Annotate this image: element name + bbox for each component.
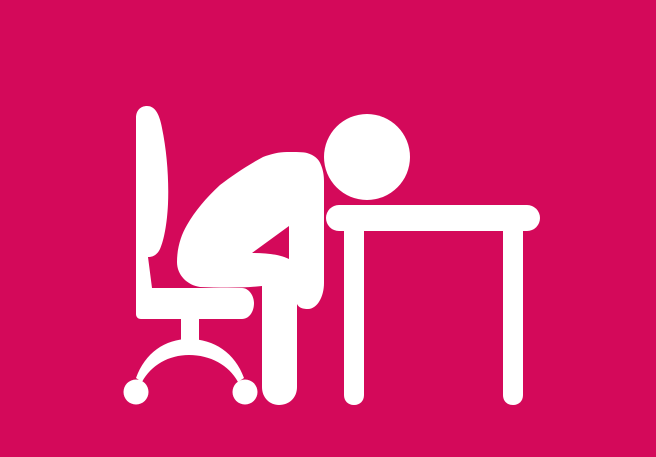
icon: slumped person — [177, 114, 410, 405]
head — [324, 114, 410, 200]
chair base arc — [136, 339, 244, 382]
icon: desk — [326, 205, 540, 405]
left desk leg — [344, 225, 364, 405]
desk top — [326, 205, 540, 231]
chair back — [136, 106, 254, 319]
icon: office chair — [124, 106, 258, 404]
right wheel — [232, 380, 258, 404]
chair post — [181, 315, 199, 345]
person body — [177, 152, 324, 405]
left wheel — [124, 380, 148, 404]
right desk leg — [503, 225, 523, 405]
